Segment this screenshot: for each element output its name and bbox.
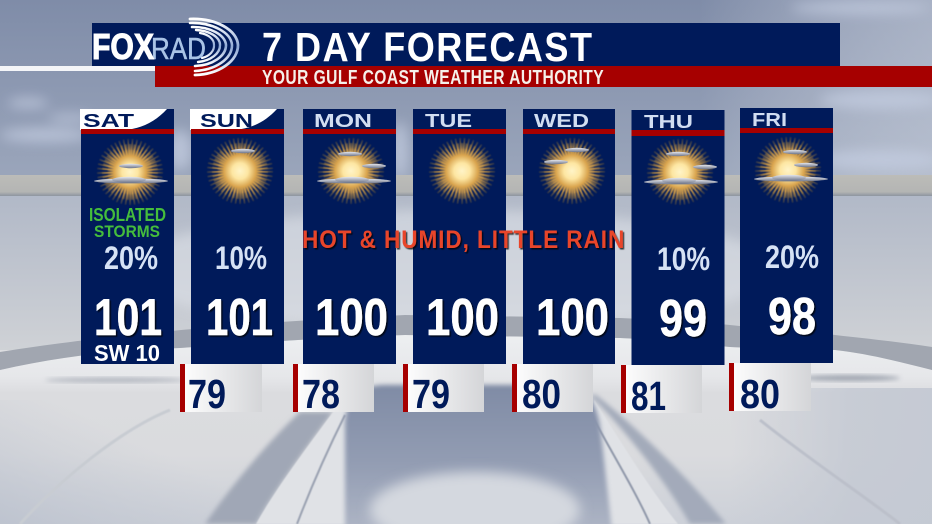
white rule xyxy=(0,66,155,71)
low temperature: Sunday: 79 xyxy=(188,371,226,417)
rain chance: 10% xyxy=(657,241,710,277)
high temperature: 100 xyxy=(315,289,388,347)
icon: sun with clouds xyxy=(644,149,718,195)
header banner xyxy=(0,19,932,88)
panel: Monday xyxy=(303,109,396,364)
storm label: STORMS xyxy=(94,222,160,241)
rain chance: 20% xyxy=(104,240,158,276)
panel: Wednesday xyxy=(523,109,615,364)
high temperature: 101 xyxy=(206,289,273,347)
icon: sun with clouds xyxy=(754,147,828,193)
low temperature: Thursday: 81 xyxy=(631,373,666,419)
icon: sun with clouds xyxy=(317,148,391,194)
title: 7 DAY FORECAST xyxy=(262,25,592,71)
day label: MON xyxy=(314,111,372,131)
low temperature: Tuesday xyxy=(403,364,484,417)
logo: FOX RAD: FOX xyxy=(92,26,154,67)
rain chance: 10% xyxy=(215,240,267,276)
high temperature: 98 xyxy=(768,288,816,346)
day label: SAT xyxy=(83,111,134,131)
low temperature: Friday xyxy=(729,363,811,417)
low temperature: Tuesday: 79 xyxy=(412,371,450,417)
icon: sun xyxy=(217,148,263,194)
high temperature: 101 xyxy=(94,289,162,347)
day label: WED xyxy=(534,111,589,131)
logo: FOX RAD: RAD xyxy=(151,31,206,66)
low temperature: Monday: 78 xyxy=(302,371,340,417)
title bar xyxy=(92,23,840,66)
low temperature: Friday: 80 xyxy=(740,371,780,417)
wind: SW 10 xyxy=(94,340,160,366)
icon: sun with clouds xyxy=(94,149,168,195)
subtitle: YOUR GULF COAST WEATHER AUTHORITY xyxy=(262,66,604,88)
low temperature: Thursday xyxy=(621,365,702,419)
day label: THU xyxy=(644,112,693,132)
panel: Friday xyxy=(740,108,833,363)
panel: Sunday xyxy=(190,109,284,364)
logo: FOX RAD xyxy=(92,19,238,75)
tub shape xyxy=(345,385,612,524)
day label: SUN xyxy=(200,111,253,131)
day label: FRI xyxy=(752,110,787,130)
low temperature: Wednesday xyxy=(512,364,593,417)
storm label: ISOLATED xyxy=(89,205,166,225)
panel: Thursday xyxy=(632,110,724,365)
high temperature: 100 xyxy=(426,289,499,347)
rain chance: 20% xyxy=(765,239,819,275)
red subtitle bar xyxy=(155,66,932,87)
panel: Tuesday xyxy=(413,109,506,364)
high temperature: 99 xyxy=(659,290,707,348)
white ledge under arch xyxy=(0,335,932,392)
low temperature: Wednesday: 80 xyxy=(522,371,561,417)
icon: sun xyxy=(439,148,485,194)
tub side bands xyxy=(205,395,726,524)
grey arch band xyxy=(0,315,932,370)
storm label xyxy=(89,205,166,241)
day label: TUE xyxy=(425,111,472,131)
low temperature: Monday xyxy=(293,364,374,417)
high temperature: 100 xyxy=(536,289,609,347)
horizon band xyxy=(0,175,932,196)
callout: hot and humid: HOT & HUMID, LITTLE RAIN xyxy=(302,226,624,254)
low temperature: Sunday xyxy=(180,364,262,417)
panel: Saturday xyxy=(80,109,174,366)
icon: sun with clouds xyxy=(544,148,595,194)
